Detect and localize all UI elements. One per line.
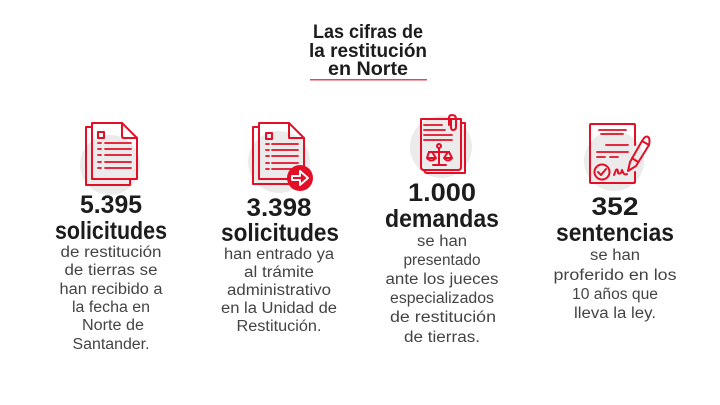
text block: especializados <box>390 290 494 307</box>
text block: 10 años que <box>572 286 658 303</box>
panel: 352 sentencias <box>554 124 677 322</box>
title <box>309 22 427 80</box>
text block: de tierras. <box>404 329 480 346</box>
text block <box>386 233 499 346</box>
text block <box>221 246 337 335</box>
text block: proferido en los <box>554 267 677 284</box>
heading: label: solicitudes <box>221 219 339 247</box>
panel: 3.398 solicitudes <box>221 123 339 335</box>
text block: de restitución <box>60 244 162 261</box>
title: Las cifras de <box>313 22 423 43</box>
heading: number: 5.395 <box>80 191 142 219</box>
icon: arrow badge <box>287 165 313 191</box>
text block: Restitución. <box>236 318 322 335</box>
heading: number: 352 <box>592 193 638 221</box>
text block: se han <box>590 247 640 264</box>
icon: documents <box>80 123 140 195</box>
heading: label: sentencias <box>556 219 674 247</box>
text block: presentado <box>404 252 480 269</box>
text block: lleva la ley. <box>574 305 656 322</box>
text block: Santander. <box>72 336 150 353</box>
text block <box>554 247 677 322</box>
title: en Norte <box>328 59 408 80</box>
heading: label: solicitudes <box>55 217 167 245</box>
text block: han entrado ya <box>224 246 334 263</box>
icon: signed document with pen <box>584 124 650 191</box>
panel: 5.395 solicitudes <box>55 123 167 353</box>
text block: Norte de <box>82 317 144 334</box>
text block: han recibido a <box>60 281 163 298</box>
title: la restitución <box>309 41 427 62</box>
panel: 1.000 demandas <box>385 115 499 346</box>
heading: label: demandas <box>385 205 499 233</box>
text block: al trámite <box>244 264 314 281</box>
heading: number: 1.000 <box>408 179 476 207</box>
text block: se han <box>417 233 467 250</box>
text block: ante los jueces <box>386 271 499 288</box>
text block <box>60 244 163 353</box>
text block: administrativo <box>227 282 331 299</box>
text block: de restitución <box>390 309 496 326</box>
text block: de tierras se <box>64 262 158 279</box>
text block: la fecha en <box>72 299 150 316</box>
icon: documents with arrow <box>248 123 313 193</box>
icon: legal document with scales <box>410 115 472 178</box>
text block: en la Unidad de <box>221 300 337 317</box>
heading: number: 3.398 <box>246 194 312 222</box>
